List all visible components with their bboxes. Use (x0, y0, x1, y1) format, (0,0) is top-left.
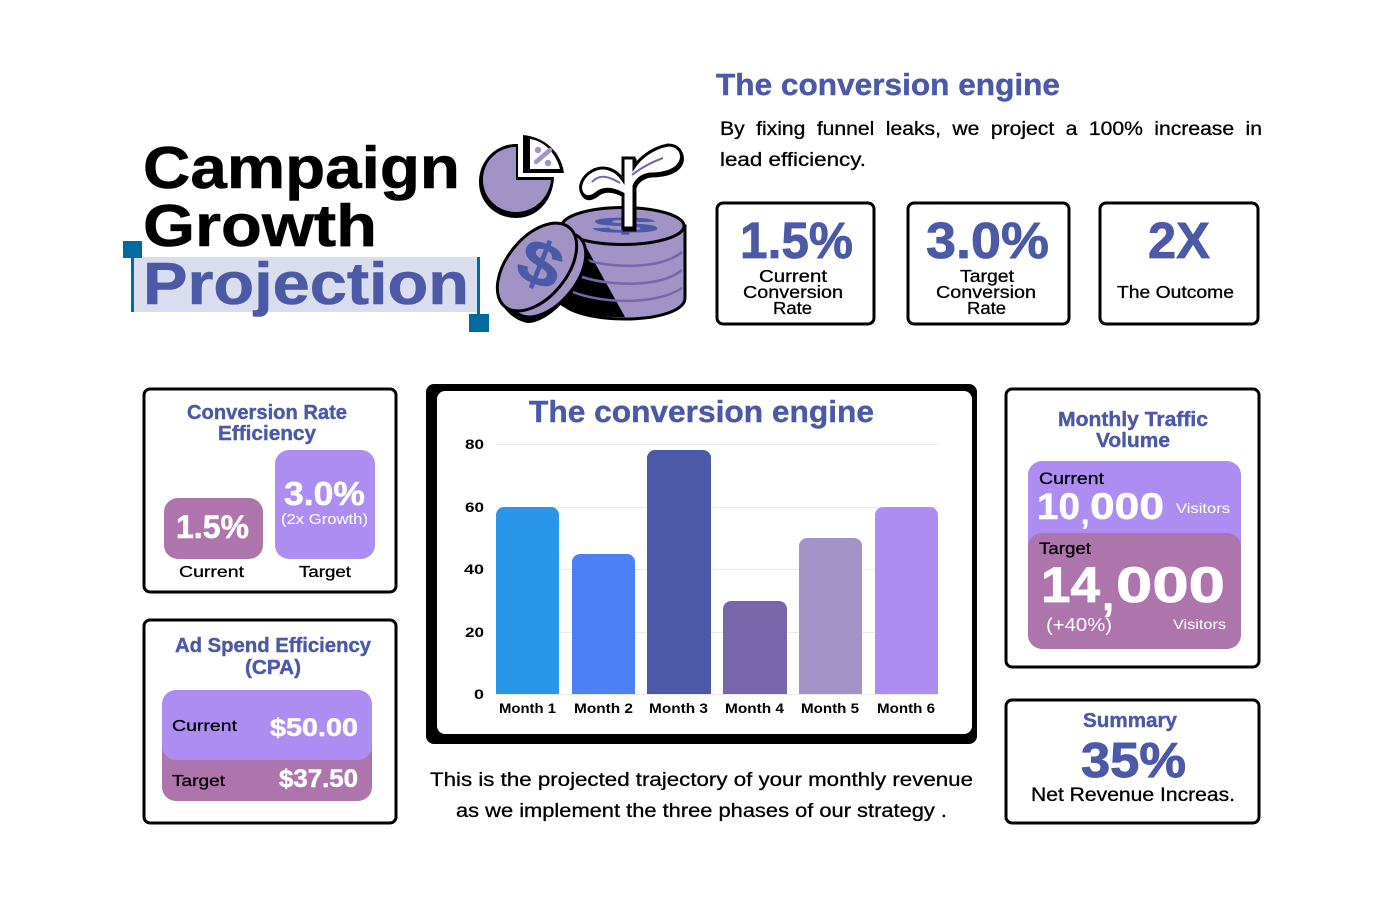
panel heading (175, 635, 372, 679)
current CPA row: Current (172, 718, 238, 735)
y axis labels: 20 (465, 624, 484, 640)
icon: pie chart with percent slice (479, 135, 564, 218)
target traffic: 000 (1116, 557, 1225, 613)
title: Campaign Growth Projection: Projection (143, 251, 469, 317)
panel heading (187, 402, 347, 445)
stat card: the outcome (1100, 203, 1258, 324)
current CPA row (162, 690, 372, 760)
stat card: target conversion rate: Conversion (936, 282, 1036, 302)
y axis labels: 60 (465, 499, 484, 515)
stat card: the outcome: The Outcome (1117, 282, 1234, 302)
y axis labels: 0 (474, 686, 484, 702)
stat card: current conversion rate: Rate (773, 298, 812, 318)
panel: conversion rate efficiency (144, 389, 396, 592)
current traffic: , (1081, 498, 1089, 531)
panel heading (1058, 409, 1208, 452)
panel heading: Monthly Traffic (1058, 409, 1208, 431)
current traffic: Current (1039, 469, 1104, 488)
stat card: target conversion rate: 3.0% (926, 212, 1049, 269)
target CPA row: Target (172, 773, 226, 790)
panel: bar chart frame (426, 384, 977, 744)
target rate tile: Target (299, 564, 352, 581)
current rate tile: 1.5% (176, 509, 249, 545)
stat card: current conversion rate: Current (759, 266, 827, 286)
title: Campaign Growth Projection: Campaign (143, 135, 460, 201)
panel: summary: Summary (1083, 710, 1178, 732)
y axis labels (464, 436, 484, 702)
chart heading: The conversion engine (529, 394, 874, 429)
panel heading: Ad Spend Efficiency (175, 635, 372, 657)
bars (496, 450, 938, 694)
y axis labels: 40 (464, 561, 484, 577)
x axis labels: Month 5 (801, 700, 859, 716)
target traffic: 14 (1041, 557, 1100, 613)
stat card: current conversion rate: 1.5% (740, 212, 853, 269)
target rate tile (275, 450, 375, 581)
heading: The conversion engine: The conversion engine (716, 67, 1060, 102)
y axis labels: 80 (465, 436, 484, 452)
intro paragraph: By fixing funnel leaks, we project a 100% increase in (720, 119, 1262, 140)
target traffic: , (1102, 571, 1114, 620)
panel: summary: 35% (1081, 734, 1186, 788)
title: Campaign Growth Projection (123, 135, 489, 332)
current traffic (1028, 461, 1241, 561)
target rate tile: (2x Growth) (281, 511, 368, 528)
x axis labels: Month 4 (725, 700, 784, 716)
panel: summary (1006, 700, 1259, 823)
x axis labels (499, 700, 935, 716)
target CPA row: $37.50 (279, 765, 358, 793)
target traffic: Visitors (1173, 616, 1226, 632)
current traffic: 000 (1090, 486, 1164, 527)
stat card: target conversion rate: Rate (967, 298, 1006, 318)
title: Campaign Growth Projection: Growth (143, 193, 377, 259)
x axis labels: Month 3 (649, 700, 708, 716)
chart caption (430, 769, 973, 822)
chart caption: This is the projected trajectory of your monthly revenue (430, 769, 973, 791)
target CPA row (162, 720, 372, 801)
icon: coin stack with sprout and leaning coin (482, 145, 685, 331)
panel heading: Conversion Rate (187, 402, 347, 424)
x axis labels: Month 6 (877, 700, 935, 716)
intro paragraph: lead efficiency. (720, 150, 866, 171)
target traffic: (+40%) (1046, 615, 1112, 635)
panel: ad spend efficiency (144, 620, 396, 823)
x axis labels: Month 2 (574, 700, 633, 716)
intro paragraph (720, 119, 1262, 171)
chart caption: as we implement the three phases of our strategy . (456, 800, 947, 822)
stat card: current conversion rate (717, 203, 874, 324)
target traffic (1028, 533, 1241, 649)
panel: summary: Net Revenue Increas. (1031, 785, 1235, 806)
x axis labels: Month 1 (499, 700, 556, 716)
panel heading: Efficiency (218, 423, 317, 445)
current CPA row: $50.00 (270, 714, 358, 742)
current rate tile (164, 498, 263, 581)
stat card: target conversion rate (908, 203, 1069, 324)
current rate tile: Current (179, 564, 245, 581)
panel: monthly traffic volume (1006, 389, 1259, 667)
target rate tile: 3.0% (284, 475, 365, 512)
current traffic: 10 (1037, 486, 1080, 527)
stat card: the outcome: 2X (1148, 212, 1210, 269)
icon: coin stack with sprout and leaning coin: $ (508, 223, 574, 304)
target traffic: Target (1039, 539, 1091, 558)
panel heading: (CPA) (245, 657, 301, 679)
stat card: target conversion rate: Target (960, 266, 1014, 286)
current traffic: Visitors (1176, 500, 1230, 516)
icon: coin stack with sprout and leaning coin: $ (592, 213, 658, 238)
stat card: current conversion rate: Conversion (743, 282, 843, 302)
panel heading: Volume (1096, 430, 1170, 452)
